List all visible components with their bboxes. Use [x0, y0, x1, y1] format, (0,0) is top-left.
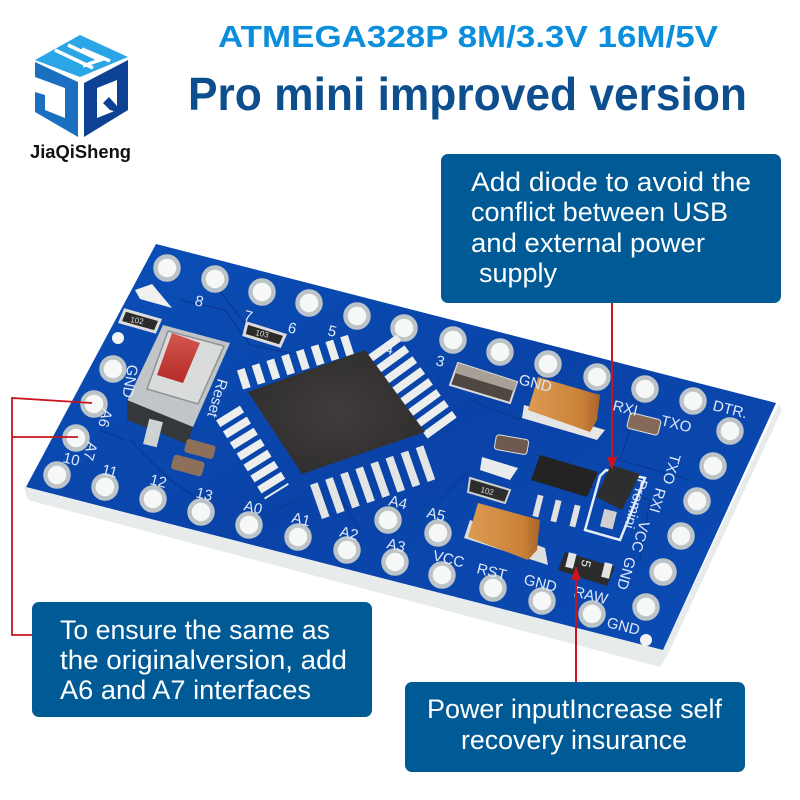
small SMD parts: 102 — [480, 485, 495, 497]
silkscreen labels: A0 — [242, 497, 264, 518]
logo wordmark: JiaQiSheng — [30, 142, 131, 162]
silkscreen labels: 12 — [148, 471, 168, 492]
silkscreen labels: RXI — [611, 397, 639, 420]
silkscreen labels: GND — [605, 614, 642, 639]
leader arrow: diode — [607, 303, 617, 470]
silkscreen labels: 3 — [434, 352, 446, 371]
silkscreen labels: A6 — [94, 407, 115, 429]
silkscreen labels: A1 — [290, 509, 312, 530]
silkscreen labels: 7 — [242, 307, 254, 326]
leader arrow: fuse — [571, 566, 581, 682]
silkscreen labels: GND — [517, 371, 554, 396]
callout: diode: supply — [479, 258, 557, 288]
silkscreen labels: Reset — [203, 377, 230, 420]
crystal — [450, 363, 517, 403]
silkscreen labels: A2 — [338, 523, 360, 544]
callout: power input: recovery insurance — [461, 725, 687, 755]
tantalum capacitors — [464, 377, 605, 565]
silkscreen labels: 8 — [193, 292, 205, 311]
callout: power input: Power inputIncrease self — [427, 694, 722, 724]
added diode — [585, 465, 645, 540]
silkscreen labels: 13 — [194, 484, 214, 505]
silkscreen labels: RST — [475, 560, 508, 584]
silkscreen labels: TXO — [659, 452, 683, 486]
callout: power input — [405, 682, 745, 772]
silkscreen labels: A5 — [425, 504, 447, 525]
silkscreen labels: A3 — [385, 535, 407, 556]
silkscreen labels: VCC — [627, 519, 652, 554]
silkscreen labels: 5 — [326, 322, 338, 341]
silkscreen labels: VCC — [431, 547, 466, 572]
subtitle: Pro mini improved version — [188, 68, 747, 120]
callout: diode: Add diode to avoid the — [471, 167, 751, 197]
silkscreen labels: 11 — [100, 461, 119, 482]
title: ATMEGA328P 8M/3.3V 16M/5V — [218, 19, 718, 54]
microcontroller chip ATMEGA328P — [228, 344, 445, 502]
silkscreen labels: Promini — [620, 477, 650, 530]
silkscreen labels — [61, 292, 749, 639]
red button cap — [157, 333, 200, 383]
silkscreen labels: A4 — [387, 492, 409, 513]
callout: A6 and A7 — [32, 602, 372, 717]
silkscreen labels: 10 — [61, 449, 81, 470]
callout: A6 and A7: A6 and A7 interfaces — [60, 675, 311, 705]
push button — [127, 325, 230, 447]
callout: A6 and A7: To ensure the same as — [60, 615, 330, 645]
traces — [100, 285, 690, 560]
callout: diode: and external power — [471, 228, 705, 258]
silkscreen labels: TXO — [659, 412, 693, 436]
callout: A6 and A7 interfaces leader lines — [12, 398, 92, 635]
self-recovery fuse — [558, 552, 615, 586]
board surface — [26, 244, 776, 650]
small SMD parts: 102 — [130, 315, 145, 326]
silkscreen labels: GND — [522, 571, 559, 596]
logo: JiaQiSheng cube — [30, 35, 131, 162]
small SMD parts: 103 — [255, 328, 270, 340]
header holes — [46, 256, 742, 646]
silkscreen labels: DTR. — [711, 397, 749, 422]
small SMD parts — [120, 284, 661, 503]
title — [188, 19, 747, 120]
voltage regulator — [531, 455, 598, 527]
circuit board — [24, 244, 782, 667]
silkscreen labels: 6 — [286, 319, 298, 338]
silkscreen labels: GND — [118, 363, 141, 399]
silkscreen labels: GND — [613, 555, 638, 592]
silkscreen labels: A7 — [79, 440, 100, 462]
silkscreen labels: RAW — [572, 583, 610, 608]
silkscreen labels: 4 — [383, 340, 395, 359]
silkscreen labels: RXI — [645, 486, 668, 515]
callout: diode: conflict between USB — [471, 197, 728, 227]
callout: A6 and A7: the originalversion, add — [60, 645, 347, 675]
board edge — [24, 404, 782, 667]
self-recovery fuse: 5 — [578, 558, 594, 569]
callout: diode — [441, 154, 781, 303]
